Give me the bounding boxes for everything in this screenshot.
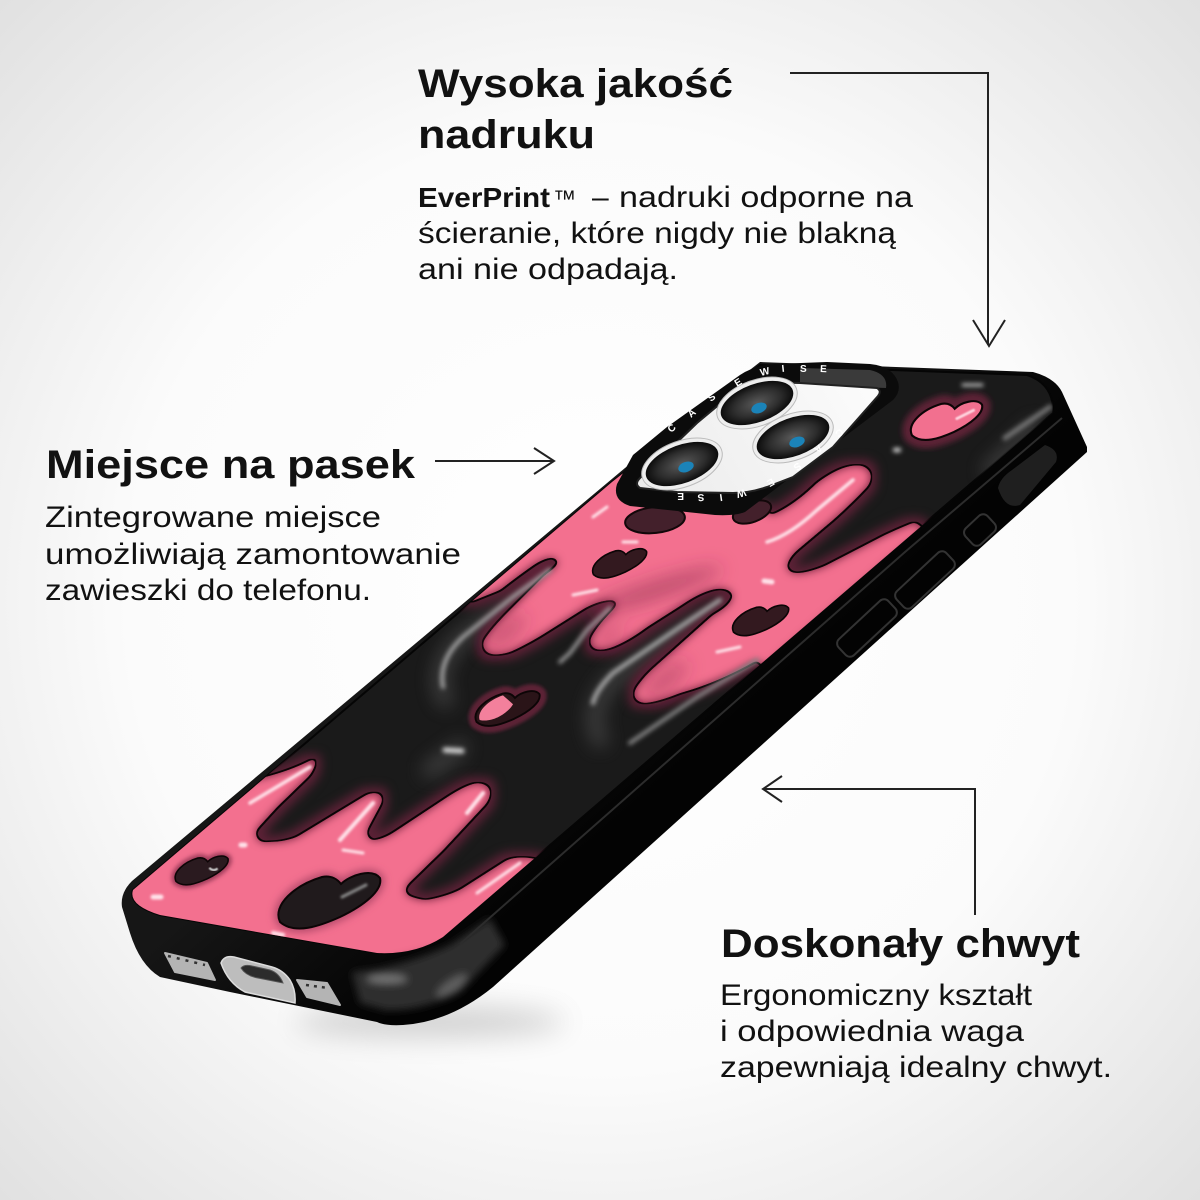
callout: print quality [418, 62, 913, 286]
camera window [637, 382, 880, 493]
body line 1: Zintegrowane miejsce [45, 501, 381, 534]
ovals under camera [624, 500, 772, 534]
trademark: ™ [553, 186, 576, 213]
left speaker [165, 953, 215, 980]
side buttons [835, 512, 998, 659]
bottom corner sheen [352, 918, 505, 1010]
body line 2: umożliwiają zamontowanie [45, 538, 461, 571]
heading: Doskonały chwyt [721, 922, 1080, 966]
upper pink drip [458, 440, 925, 703]
glossy highlights on black [442, 385, 1050, 751]
heart: pink top right [911, 401, 982, 440]
dash: – [592, 181, 609, 214]
back face [132, 365, 1053, 953]
camera bumper [616, 362, 899, 515]
glossy highlights on pink [153, 480, 853, 935]
heart: small black lower left [175, 856, 228, 885]
heart: small black right [733, 605, 789, 636]
brand lettering lower: CASEWISE [677, 426, 845, 502]
callout: strap slot [45, 443, 461, 607]
body line 2: ścieranie, które nigdy nie blakną [418, 217, 896, 250]
brand lettering upper: CASEWISE [666, 364, 827, 435]
phone case [122, 362, 1087, 1025]
heading: Wysoka jakość [418, 62, 733, 106]
body line 1: Ergonomiczny kształt [720, 979, 1033, 1012]
charging port [221, 957, 295, 1003]
body line 3: ani nie odpadają. [418, 253, 678, 286]
dark pink shading [479, 560, 724, 706]
body line 3: zapewniają idealny chwyt. [720, 1051, 1112, 1084]
lens: right [746, 401, 840, 473]
body line 3: zawieszki do telefonu. [45, 574, 371, 607]
rim highlight [460, 418, 1062, 944]
face artwork [122, 385, 1050, 965]
soft sheen on black [430, 428, 1035, 770]
inner bumper band [800, 368, 886, 388]
brand name: EverPrint [418, 182, 550, 213]
strap slot [998, 445, 1057, 506]
lens: left [635, 428, 729, 500]
heart: small black upper [593, 549, 647, 578]
lens: top [710, 367, 804, 439]
heading: Miejsce na pasek [46, 443, 416, 487]
heart: large black [278, 873, 380, 929]
body line 2: i odpowiednia waga [720, 1015, 1024, 1048]
lower pink drip [122, 758, 545, 965]
callout: grip [720, 922, 1112, 1084]
body line 1: nadruki odporne na [619, 181, 913, 214]
arrow: grip [763, 776, 975, 915]
arrow: strap slot [435, 448, 554, 474]
arrow: print quality [790, 73, 1005, 346]
heart: pink centre [475, 691, 540, 726]
right speaker [297, 980, 340, 1005]
case body silhouette [122, 362, 1087, 1025]
phone shadow [295, 1006, 565, 1038]
heading line 2: nadruku [418, 113, 595, 157]
